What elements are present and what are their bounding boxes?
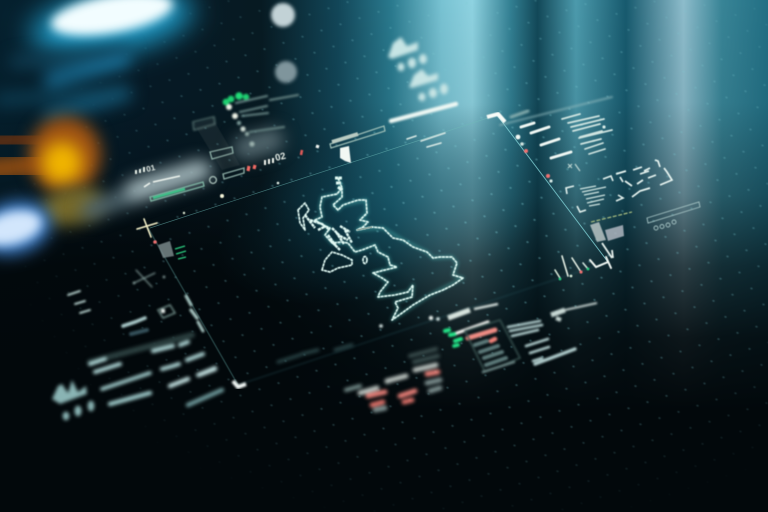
label 01: 01 — [145, 163, 157, 174]
panel frame lines — [148, 97, 612, 385]
Inner islands cluster — [305, 215, 352, 250]
HUD: lower-left widgets — [68, 270, 175, 334]
panel corner: bottom left — [233, 381, 246, 387]
HUD: spike bar chart — [555, 256, 611, 280]
map panel glow — [150, 90, 650, 320]
HUD: green status list — [223, 92, 298, 147]
blurred light: grey streak — [90, 140, 272, 210]
HUD: left edge dashes — [186, 296, 203, 331]
HUD: top white bar — [391, 104, 456, 121]
blurred light: pale blue bokeh — [0, 193, 57, 263]
map glow — [315, 178, 463, 320]
HUD: switch panel outlines — [150, 117, 244, 201]
HUD: top status numbers — [136, 145, 318, 187]
Isle of Man — [363, 256, 367, 264]
HUD: input field — [647, 202, 700, 230]
HUD: blurred lower-left chart — [52, 380, 94, 420]
bokeh circles — [271, 3, 297, 83]
HUD: flag pattern block — [590, 212, 632, 258]
Faded England inland border — [357, 227, 372, 230]
blurred light: blue streaks — [0, 52, 125, 116]
UK map outline — [298, 178, 463, 320]
coast lines — [298, 178, 463, 320]
Northern isles — [335, 178, 342, 190]
blurred light: olive bokeh — [37, 181, 107, 231]
blurred light: orange and yellow bokeh — [0, 117, 101, 193]
HUD: green indicators with gauge panel — [445, 320, 520, 372]
HUD: bottom table cards — [346, 349, 440, 410]
label 02: 02 — [274, 151, 287, 164]
panel corner: top left crosshair — [137, 219, 157, 244]
Great Britain coastline — [315, 178, 463, 320]
HUD: map dots and lower labels — [379, 303, 597, 328]
HUD: faint labels beneath the map — [278, 345, 352, 362]
HUD: top edge widgets — [183, 126, 445, 214]
HUD: dashed data box — [616, 160, 672, 197]
HUD: right edge indicators — [516, 135, 580, 183]
Northern Ireland coast — [322, 252, 352, 272]
blurred light: cyan white streak — [26, 0, 198, 66]
HUD: blurred top-right chart — [388, 37, 448, 101]
HUD: right data column — [508, 321, 575, 364]
HUD: bracketed data box — [566, 176, 623, 212]
HUD: lower-left table — [90, 335, 222, 405]
panel corner: top right — [487, 114, 505, 122]
HUD: small grey block near left corner — [158, 241, 186, 259]
HUD: right-side labels — [511, 111, 612, 158]
Outer Hebrides — [298, 203, 309, 230]
